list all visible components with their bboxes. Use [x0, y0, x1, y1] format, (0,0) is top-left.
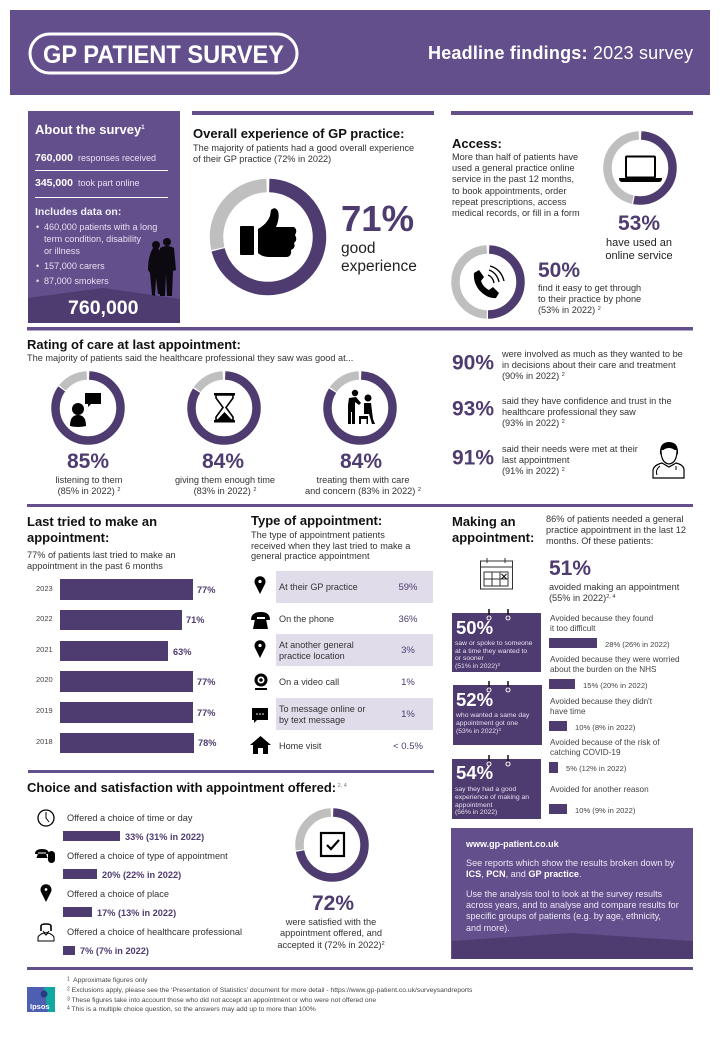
panel: type of appointment: received when they last tried to make a [251, 541, 411, 551]
card: 52% same day [453, 681, 542, 745]
rating text: The majority of patients said the healthcare professional they saw was good at... [27, 353, 353, 363]
table row: on the phone [251, 612, 418, 629]
bar: too difficult: it too difficult [550, 624, 596, 633]
includes data list: 460,000 patients with a long [44, 222, 157, 232]
panel: type of appointment: general practice appointment [251, 551, 370, 561]
table row: video call: On a video call [279, 677, 339, 687]
footnotes: These figures take into account those who did not accept an appointment or who were not offered one [70, 997, 376, 1004]
icon: calendar [480, 558, 512, 589]
donut chart: 72% [300, 812, 364, 878]
stat: 84% care and concern: treating them with care [317, 475, 409, 485]
stat: 71% good experience [341, 198, 417, 275]
bar chart: by year: 77% [197, 677, 215, 687]
access text: to book appointments, order [452, 186, 566, 196]
stat: 84% care and concern: 84% [340, 450, 382, 473]
icon: doctor [653, 442, 684, 478]
access text: used a general practice online [452, 163, 575, 173]
stat: 53% online service [605, 212, 673, 262]
access text [452, 152, 580, 218]
stat: 93% confidence: said they have confidence and trust in the [502, 396, 672, 406]
includes data list: • [36, 222, 39, 232]
table row: online message: To message online or [279, 704, 365, 714]
bar: COVID-19 risk: Avoided because of the risk of [550, 738, 660, 747]
choice row: type of appointment [35, 849, 228, 880]
stat: 84% care and concern [305, 450, 421, 496]
footnotes: 4 [67, 1006, 70, 1012]
panel: about the survey [28, 111, 180, 323]
includes data list: Includes data on: [35, 206, 121, 218]
card: 50% at a time they wanted [452, 609, 541, 672]
bar: burden on NHS: about the burden on the NHS [550, 665, 657, 674]
card: 50% at a time they wanted: (51% in 2022) [455, 663, 497, 670]
stat: 91% needs met: (91% in 2022) [502, 466, 559, 476]
stat: 84% care and concern: 2 [418, 487, 421, 493]
reports text: See reports which show the results broken down by [466, 858, 675, 868]
last tried text: 77% of patients last tried to make an [27, 550, 176, 560]
stat: 72% satisfied: appointment offered, and [280, 928, 382, 938]
table row: at their GP practice: 59% [398, 582, 418, 593]
last tried heading: Last tried to make an [27, 514, 157, 529]
stat: 84% enough time [175, 450, 275, 496]
bar: too difficult: 28% (26% in 2022) [605, 640, 670, 649]
bar chart: by year: 71% [186, 615, 204, 625]
table row: home visit: Home visit [279, 741, 322, 751]
footnotes: 2 [67, 986, 70, 992]
card: 54% good experience: (56% in 2022) [455, 809, 497, 816]
bar: another reason [549, 785, 649, 815]
bar: burden on NHS [549, 655, 680, 690]
table row: video call: 1% [401, 677, 415, 688]
stat: 50% phone: 50% [538, 259, 580, 282]
stat: 71% good experience: 71% [341, 198, 414, 239]
icon: couple silhouette [148, 238, 176, 296]
survey logo pill: GP PATIENT SURVEY [43, 41, 284, 69]
choice row: time or day [38, 810, 204, 842]
stat: 71% good experience: experience [341, 258, 417, 275]
stat: 85% listening: 85% [67, 450, 109, 473]
big total: 760,000 [68, 297, 139, 319]
access text: service in the past 12 months, [452, 174, 574, 184]
online stat: 345,000 took part online [35, 177, 140, 189]
stat: 51% avoided: 2, 4 [606, 594, 615, 600]
icon: clinician treating patient [348, 390, 375, 424]
stat: 53% online service: 53% [618, 212, 660, 235]
choice row: place: Offered a choice of place [67, 889, 169, 899]
stat: 90% involved: 2 [562, 372, 565, 378]
bar chart: by year: 2022 [36, 614, 53, 623]
stat: 51% avoided [549, 557, 680, 603]
about heading: About the survey [35, 122, 141, 137]
panel: last tried to make an appointment: appointment: [27, 530, 109, 545]
panel: website callout: across years, and to analyse and compare results for [466, 900, 679, 910]
panel: access [451, 111, 693, 315]
table row: another location: practice location [279, 651, 345, 661]
stat: 51% avoided: avoided making an appointment [549, 582, 680, 592]
stat: 72% satisfied: 72% [312, 892, 354, 915]
stat: 93% confidence: 93% [452, 398, 494, 420]
bar chart: by year: 2018 [36, 737, 53, 746]
bar: COVID-19 risk [549, 738, 660, 773]
footer: Ipsos logo: Ipsos [30, 1002, 50, 1011]
includes data list: 87,000 smokers [44, 276, 109, 286]
choice heading: Choice and satisfaction with appointment offered: [27, 780, 336, 795]
stat: 72% satisfied: accepted it (72% in 2022) [277, 940, 382, 950]
stat: 93% confidence: healthcare professional they saw [502, 407, 636, 417]
table row: home visit [250, 736, 423, 754]
stat: 91% needs met: said their needs were met at their [502, 444, 638, 454]
table row: home visit: < 0.5% [393, 741, 423, 752]
panel: website callout [451, 828, 693, 959]
stat: 84% enough time: giving them enough time [175, 475, 275, 485]
table row: online message [252, 698, 433, 730]
stat: 90% involved: were involved as much as they wanted to be [501, 349, 683, 359]
overall text: The majority of patients had a good overall experience [193, 143, 414, 153]
donut chart: 50% [456, 250, 520, 314]
stat: 84% enough time: 84% [202, 450, 244, 473]
footnotes: This is a multiple choice question, so the answers may add up to more than 100% [70, 1006, 316, 1013]
stat: 91% needs met [452, 444, 638, 476]
bar chart: by year [36, 579, 216, 753]
panel: making an appointment: appointment: [452, 530, 534, 545]
stat: 93% confidence [452, 396, 672, 428]
stat: 90% involved: in decisions about their care and treatment [502, 360, 676, 370]
bar chart: by year: 63% [173, 647, 191, 657]
stat: 71% good experience: good [341, 240, 375, 257]
includes data list: • [36, 261, 39, 271]
bar: COVID-19 risk: catching COVID-19 [550, 748, 621, 757]
donut chart: 85% [56, 376, 120, 440]
table row: on the phone: 36% [398, 614, 418, 625]
bar chart: by year: 2019 [36, 706, 53, 715]
choice row: type of appointment: Offered a choice of type of appointment [67, 851, 228, 861]
stat: 91% needs met: 91% [452, 446, 494, 470]
includes data list: 157,000 carers [44, 261, 105, 271]
card: 54% good experience [452, 755, 541, 819]
footnotes: Exclusions apply, please see the ‘Presentation of Statistics’ document for more detail - https://www.gp-patient.co.uk/surveysandreports [70, 987, 473, 994]
donut chart: 53% [608, 136, 672, 200]
stat: 91% needs met: 2 [562, 467, 565, 473]
card: 54% good experience: experience of making an [455, 794, 529, 801]
stat: 51% avoided: (55% in 2022) [549, 593, 606, 603]
footnotes: Approximate figures only [70, 977, 148, 984]
panel: rating of care [27, 337, 684, 496]
card: 50% at a time they wanted: 3 [497, 662, 500, 667]
card: 52% same day: 3 [498, 727, 501, 732]
choice row: place [41, 884, 176, 918]
choice row: type of appointment: 20% (22% in 2022) [102, 870, 181, 880]
stat: 53% online service: online service [605, 250, 673, 262]
about heading: 1 [141, 125, 145, 131]
stat: 93% confidence: 2 [562, 419, 565, 425]
stat: 72% satisfied [277, 892, 385, 950]
stat: 72% satisfied: 2 [382, 941, 385, 947]
table row: online message: 1% [401, 709, 415, 720]
stat: 72% satisfied: were satisfied with the [285, 917, 376, 927]
bar: burden on NHS: 15% (20% in 2022) [583, 681, 648, 690]
stat: 85% listening: 2 [117, 487, 120, 493]
overall heading: Overall experience of GP practice: [193, 126, 404, 141]
choice row: place: 17% (13% in 2022) [97, 908, 176, 918]
panel: last tried to make an appointment: appointment in the past 6 months [27, 561, 163, 571]
bar: COVID-19 risk: 5% (12% in 2022) [566, 764, 627, 773]
panel: type of appointment [250, 513, 433, 754]
stat: 90% involved: (90% in 2022) [502, 371, 559, 381]
choice row: healthcare professional: Offered a choice of healthcare professional [67, 927, 242, 937]
stat: 90% involved [452, 349, 683, 381]
footnotes [67, 976, 473, 1013]
donut chart: 84% care [328, 376, 392, 440]
stat: 85% listening: (85% in 2022) [58, 486, 115, 496]
card: 54% good experience: 54% [456, 762, 493, 783]
stat: 90% involved: 90% [452, 352, 494, 374]
icon: checkbox [321, 833, 344, 856]
donut chart: 84% time [192, 376, 256, 440]
bar chart: by year: 77% [197, 585, 215, 595]
panel: making an appointment: practice appointment in the last 12 [546, 525, 686, 535]
stat: 50% phone: to their practice by phone [538, 294, 641, 304]
choice row: healthcare professional [38, 924, 242, 956]
table row: on the phone: On the phone [279, 614, 334, 624]
header subtitle: Headline findings: 2023 survey [428, 43, 693, 63]
donut chart: 71% [216, 186, 320, 288]
responses stat: 760,000 responses received [35, 152, 156, 164]
stat: 91% needs met: last appointment [502, 455, 570, 465]
stat: 85% listening [56, 450, 123, 496]
panel: overall experience [192, 111, 434, 288]
panel: making an appointment: months. Of these patients: [546, 536, 653, 546]
stat: 50% phone: (53% in 2022) [538, 305, 595, 315]
stat: 84% enough time: (83% in 2022) [194, 486, 251, 496]
panel: making an appointment [452, 514, 686, 819]
table row: online message: by text message [279, 715, 345, 725]
footnotes: 1 [67, 976, 70, 982]
choice row: time or day: 33% (31% in 2022) [125, 832, 204, 842]
type text: The type of appointment patients [251, 530, 385, 540]
bar: no time: Avoided because they didn't [550, 697, 653, 706]
card: 52% same day: (53% in 2022) [456, 728, 498, 735]
card: 50% at a time they wanted: saw or spoke to someone [455, 640, 533, 647]
bar: another reason: 10% (9% in 2022) [575, 806, 636, 815]
website url: www.gp-patient.co.uk [465, 839, 560, 849]
stat: 50% phone [538, 259, 641, 315]
choice row: healthcare professional: 7% (7% in 2022) [80, 946, 149, 956]
card: 50% at a time they wanted: 50% [456, 617, 493, 638]
header banner [10, 10, 710, 95]
bar: another reason: Avoided for another reason [550, 785, 649, 794]
table row: at their GP practice: At their GP practice [279, 582, 358, 592]
access text: repeat prescriptions, access [452, 197, 567, 207]
includes data list: • [36, 276, 39, 286]
stat: 51% avoided: 51% [549, 557, 591, 580]
table row: another location: At another general [279, 640, 354, 650]
choice heading: 2, 4 [336, 783, 347, 789]
stat: 50% phone: 2 [598, 306, 601, 312]
type heading: Type of appointment: [251, 513, 382, 528]
table row: at their GP practice [254, 571, 433, 603]
card: 52% same day: 52% [456, 689, 493, 710]
card: 52% same day: appointment got one [456, 720, 518, 727]
includes data list: or illness [44, 246, 80, 256]
choice row: time or day: Offered a choice of time or day [67, 813, 193, 823]
card: 54% good experience: appointment [455, 802, 493, 809]
panel: website callout: specific groups of patients (e.g. by age, ethnicity, [466, 911, 661, 921]
making heading: Making an [452, 514, 516, 529]
panel: last tried to make an appointment [27, 514, 216, 753]
bar: no time: have time [550, 707, 586, 716]
making text: 86% of patients needed a general [546, 514, 683, 524]
stat: 85% listening: listening to them [56, 475, 123, 485]
icon: person with speech bubble [70, 393, 101, 427]
footer: Ipsos logo [27, 987, 55, 1012]
bar: too difficult: Avoided because they found [550, 614, 654, 623]
bar chart: by year: 2020 [36, 675, 53, 684]
access heading: Access: [452, 136, 502, 151]
access text: medical records, or fill in a form [452, 208, 580, 218]
panel: overall experience: of their GP practice (72% in 2022) [193, 154, 331, 164]
bar chart: by year: 2023 [36, 584, 53, 593]
stat: 53% online service: have used an [606, 237, 672, 249]
card: 52% same day: who wanted a same day [455, 712, 530, 719]
panel: website callout: ICS, PCN, and GP practice. [466, 869, 582, 879]
bar chart: by year: 2021 [36, 645, 53, 654]
access text: More than half of patients have [452, 152, 578, 162]
panel: choice and satisfaction [27, 780, 385, 956]
stat: 84% care and concern: and concern (83% in 2022) [305, 486, 415, 496]
includes data list [35, 206, 157, 286]
bar: no time [549, 697, 653, 732]
stat: 84% enough time: 2 [253, 487, 256, 493]
icon: hourglass [214, 393, 235, 422]
rating heading: Rating of care at last appointment: [27, 337, 241, 352]
panel: website callout: and more). [466, 923, 510, 933]
bar chart: by year: 78% [198, 738, 216, 748]
icon: thumbs up [240, 208, 296, 257]
bar: burden on NHS: Avoided because they were worried [550, 655, 680, 664]
table row: another location: 3% [401, 645, 415, 656]
bar chart: by year: 77% [197, 708, 215, 718]
card: 50% at a time they wanted: at a time they wanted to [455, 648, 527, 655]
includes data list: term condition, disability [44, 234, 141, 244]
icon: laptop [619, 156, 662, 182]
card: 50% at a time they wanted: or sooner [455, 655, 484, 662]
icon: phone with signal [474, 266, 504, 298]
survey logo pill [30, 34, 297, 73]
table row: video call [254, 674, 415, 690]
bar: no time: 10% (8% in 2022) [575, 723, 636, 732]
bar: too difficult [549, 614, 670, 649]
analysis tool text: Use the analysis tool to look at the survey results [466, 889, 663, 899]
table row: another location [254, 634, 433, 666]
stat: 93% confidence: (93% in 2022) [502, 418, 559, 428]
stat: 50% phone: find it easy to get through [538, 283, 641, 293]
card: 54% good experience: say they had a good [455, 786, 516, 793]
footnotes: 3 [67, 996, 70, 1002]
